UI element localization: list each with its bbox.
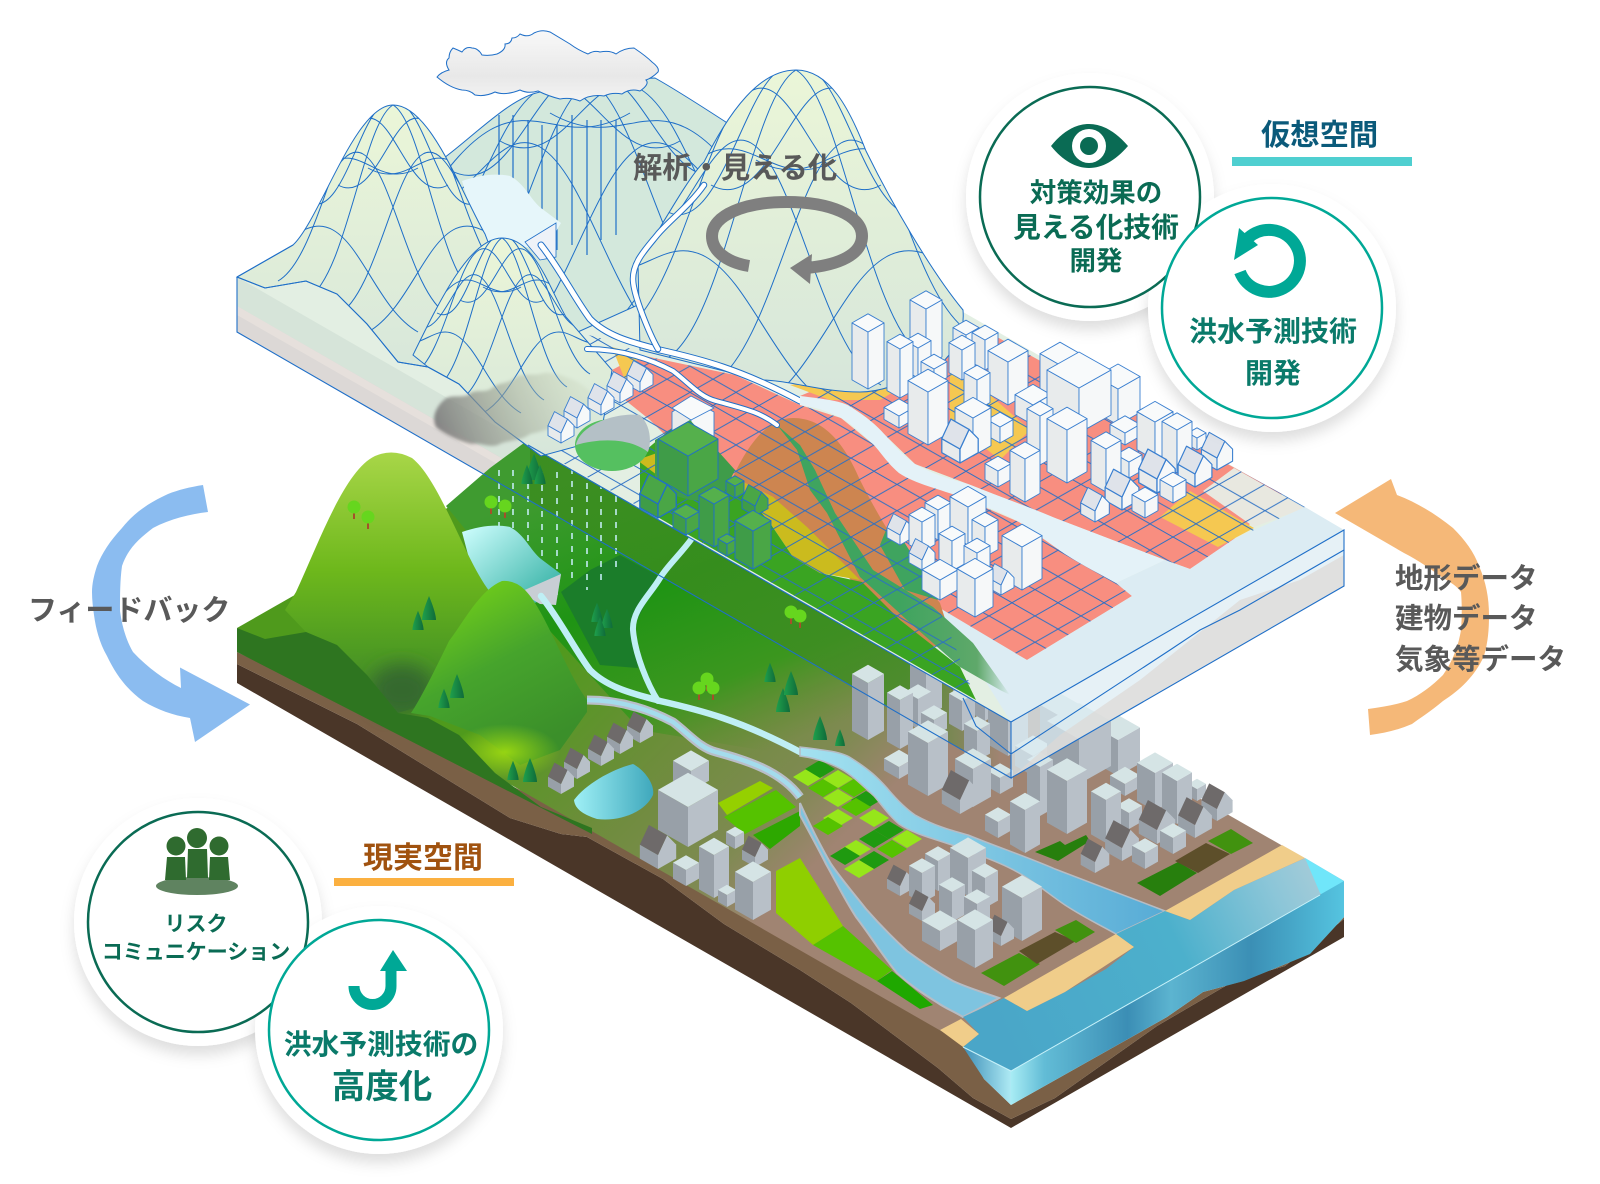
pond with storm [575, 415, 650, 471]
pale land corner [1203, 468, 1305, 527]
text: flood forecasting [1189, 316, 1357, 389]
virtual front face [1011, 530, 1344, 778]
mountain foot glow [450, 724, 560, 780]
water highlight [963, 895, 1320, 1071]
virtual surface [237, 87, 1344, 722]
virtual block outlines [237, 245, 1344, 778]
dam wall [520, 574, 561, 605]
round trees [348, 496, 806, 700]
houses in virtual space [548, 361, 653, 443]
mountain: front wireframe [412, 238, 612, 456]
hazard zone: east bank red [800, 321, 1282, 569]
text: visualization technology [1013, 178, 1179, 276]
river with embankment: inner [587, 700, 800, 797]
green tint under cluster [655, 420, 735, 500]
text: flood forecasting: 洪水予測技術 [1189, 316, 1357, 347]
data arrow [1335, 479, 1489, 735]
text: visualization technology: 見える化技術 [1013, 212, 1179, 243]
checker rice paddies [793, 760, 922, 878]
heading: real space [334, 842, 514, 886]
panel: virtual block left side [237, 277, 1011, 778]
water front left [963, 1047, 1011, 1105]
left river [800, 803, 999, 1017]
virtual front face earth band [1011, 555, 1344, 778]
translucent band under virtual edge [530, 445, 1000, 772]
pond [574, 764, 653, 820]
darker valley between rivers [561, 555, 662, 668]
island fields [981, 829, 1253, 986]
panel: real space terrain block [237, 438, 1344, 1128]
hazard: yellow [718, 468, 860, 580]
feedback arrow [92, 485, 250, 742]
valley shadow [370, 664, 434, 716]
terrain top surface [237, 438, 1344, 1071]
mountain: large left [285, 452, 510, 713]
text: flood forecasting: 開発 [1245, 358, 1301, 389]
rotate arrow: analysis cycle [712, 202, 862, 284]
label: data inputs [1395, 562, 1566, 676]
heading: real space: 現実空間 [363, 842, 483, 875]
mountain: right wireframe [638, 70, 964, 392]
dam lake [462, 526, 561, 610]
storm cloud [434, 373, 592, 446]
grid [525, 310, 1305, 700]
white city in virtual space [852, 291, 1233, 617]
circle: flood forecasting technology [1162, 198, 1382, 418]
rain [499, 468, 616, 600]
cloud [437, 31, 658, 101]
hill foot profile line [237, 277, 541, 456]
tall white building behind [672, 396, 714, 462]
east river band [800, 396, 1165, 583]
label: data inputs: 気象等データ [1395, 643, 1566, 676]
text: advanced forecasting: 高度化 [332, 1069, 432, 1106]
pale sea [938, 507, 1344, 722]
fields west [718, 781, 933, 1009]
text: advanced forecasting: 洪水予測技術の [284, 1029, 478, 1060]
icon: people [156, 828, 238, 895]
panel: virtual space layer [237, 0, 1344, 778]
beaches [940, 845, 1305, 1047]
water front right [1011, 881, 1344, 1105]
river ribbon [777, 425, 1010, 695]
text: visualization technology: 開発 [1070, 246, 1122, 276]
back hill [446, 440, 1040, 770]
heading: analysis: 解析・見える化 [633, 152, 837, 185]
icon: eye [1051, 124, 1128, 168]
small yellow patch [637, 453, 657, 475]
circle: visualization technology [980, 87, 1200, 307]
text: risk communication: コミュニケーション [102, 941, 290, 964]
virtual dam lake [462, 175, 561, 250]
dark green hillside [237, 628, 592, 834]
white rivers [541, 185, 800, 425]
pale river branch [633, 537, 693, 701]
sea surface [963, 858, 1344, 1071]
green patch near cluster [880, 520, 938, 600]
icon: circular arrow [1234, 228, 1300, 292]
circle halos: real space [74, 798, 503, 1154]
mountain: front [411, 581, 587, 765]
circle: advanced flood forecasting [269, 920, 489, 1140]
circle: risk communication [88, 812, 308, 1032]
river with embankment: outer [587, 700, 800, 797]
hazard: yellow patches [612, 347, 1254, 547]
text: risk communication: リスク [164, 913, 228, 936]
mountain: left wireframe [236, 104, 488, 384]
hazard zone: west bank red [612, 355, 1132, 660]
mountain: back wireframe [446, 78, 726, 332]
buildings: real city [548, 642, 1233, 968]
text: advanced forecasting [284, 1029, 478, 1106]
green tinted buildings [640, 422, 771, 569]
text: risk communication [102, 913, 290, 964]
heading: virtual space: 仮想空間 [1261, 119, 1378, 152]
water corner [1305, 858, 1344, 917]
heading: virtual space [1232, 119, 1412, 166]
rain in virtual space [499, 115, 616, 255]
virtual dam wall [525, 223, 556, 260]
hazard: green [640, 428, 976, 700]
right river [800, 747, 1165, 934]
river from dam [541, 596, 800, 752]
label: feedback: フィードバック [28, 595, 230, 627]
icon: up arrow [354, 950, 407, 1004]
conifers [412, 454, 845, 782]
text: visualization technology: 対策効果の [1030, 178, 1162, 208]
terrain side: dark earth [237, 664, 1344, 1128]
hazard: orange [733, 418, 955, 650]
circle halos: virtual space [966, 73, 1396, 432]
label: data inputs: 建物データ [1395, 602, 1538, 635]
label: data inputs: 地形データ [1395, 562, 1538, 595]
terrain side: brown earth [237, 652, 1344, 1119]
